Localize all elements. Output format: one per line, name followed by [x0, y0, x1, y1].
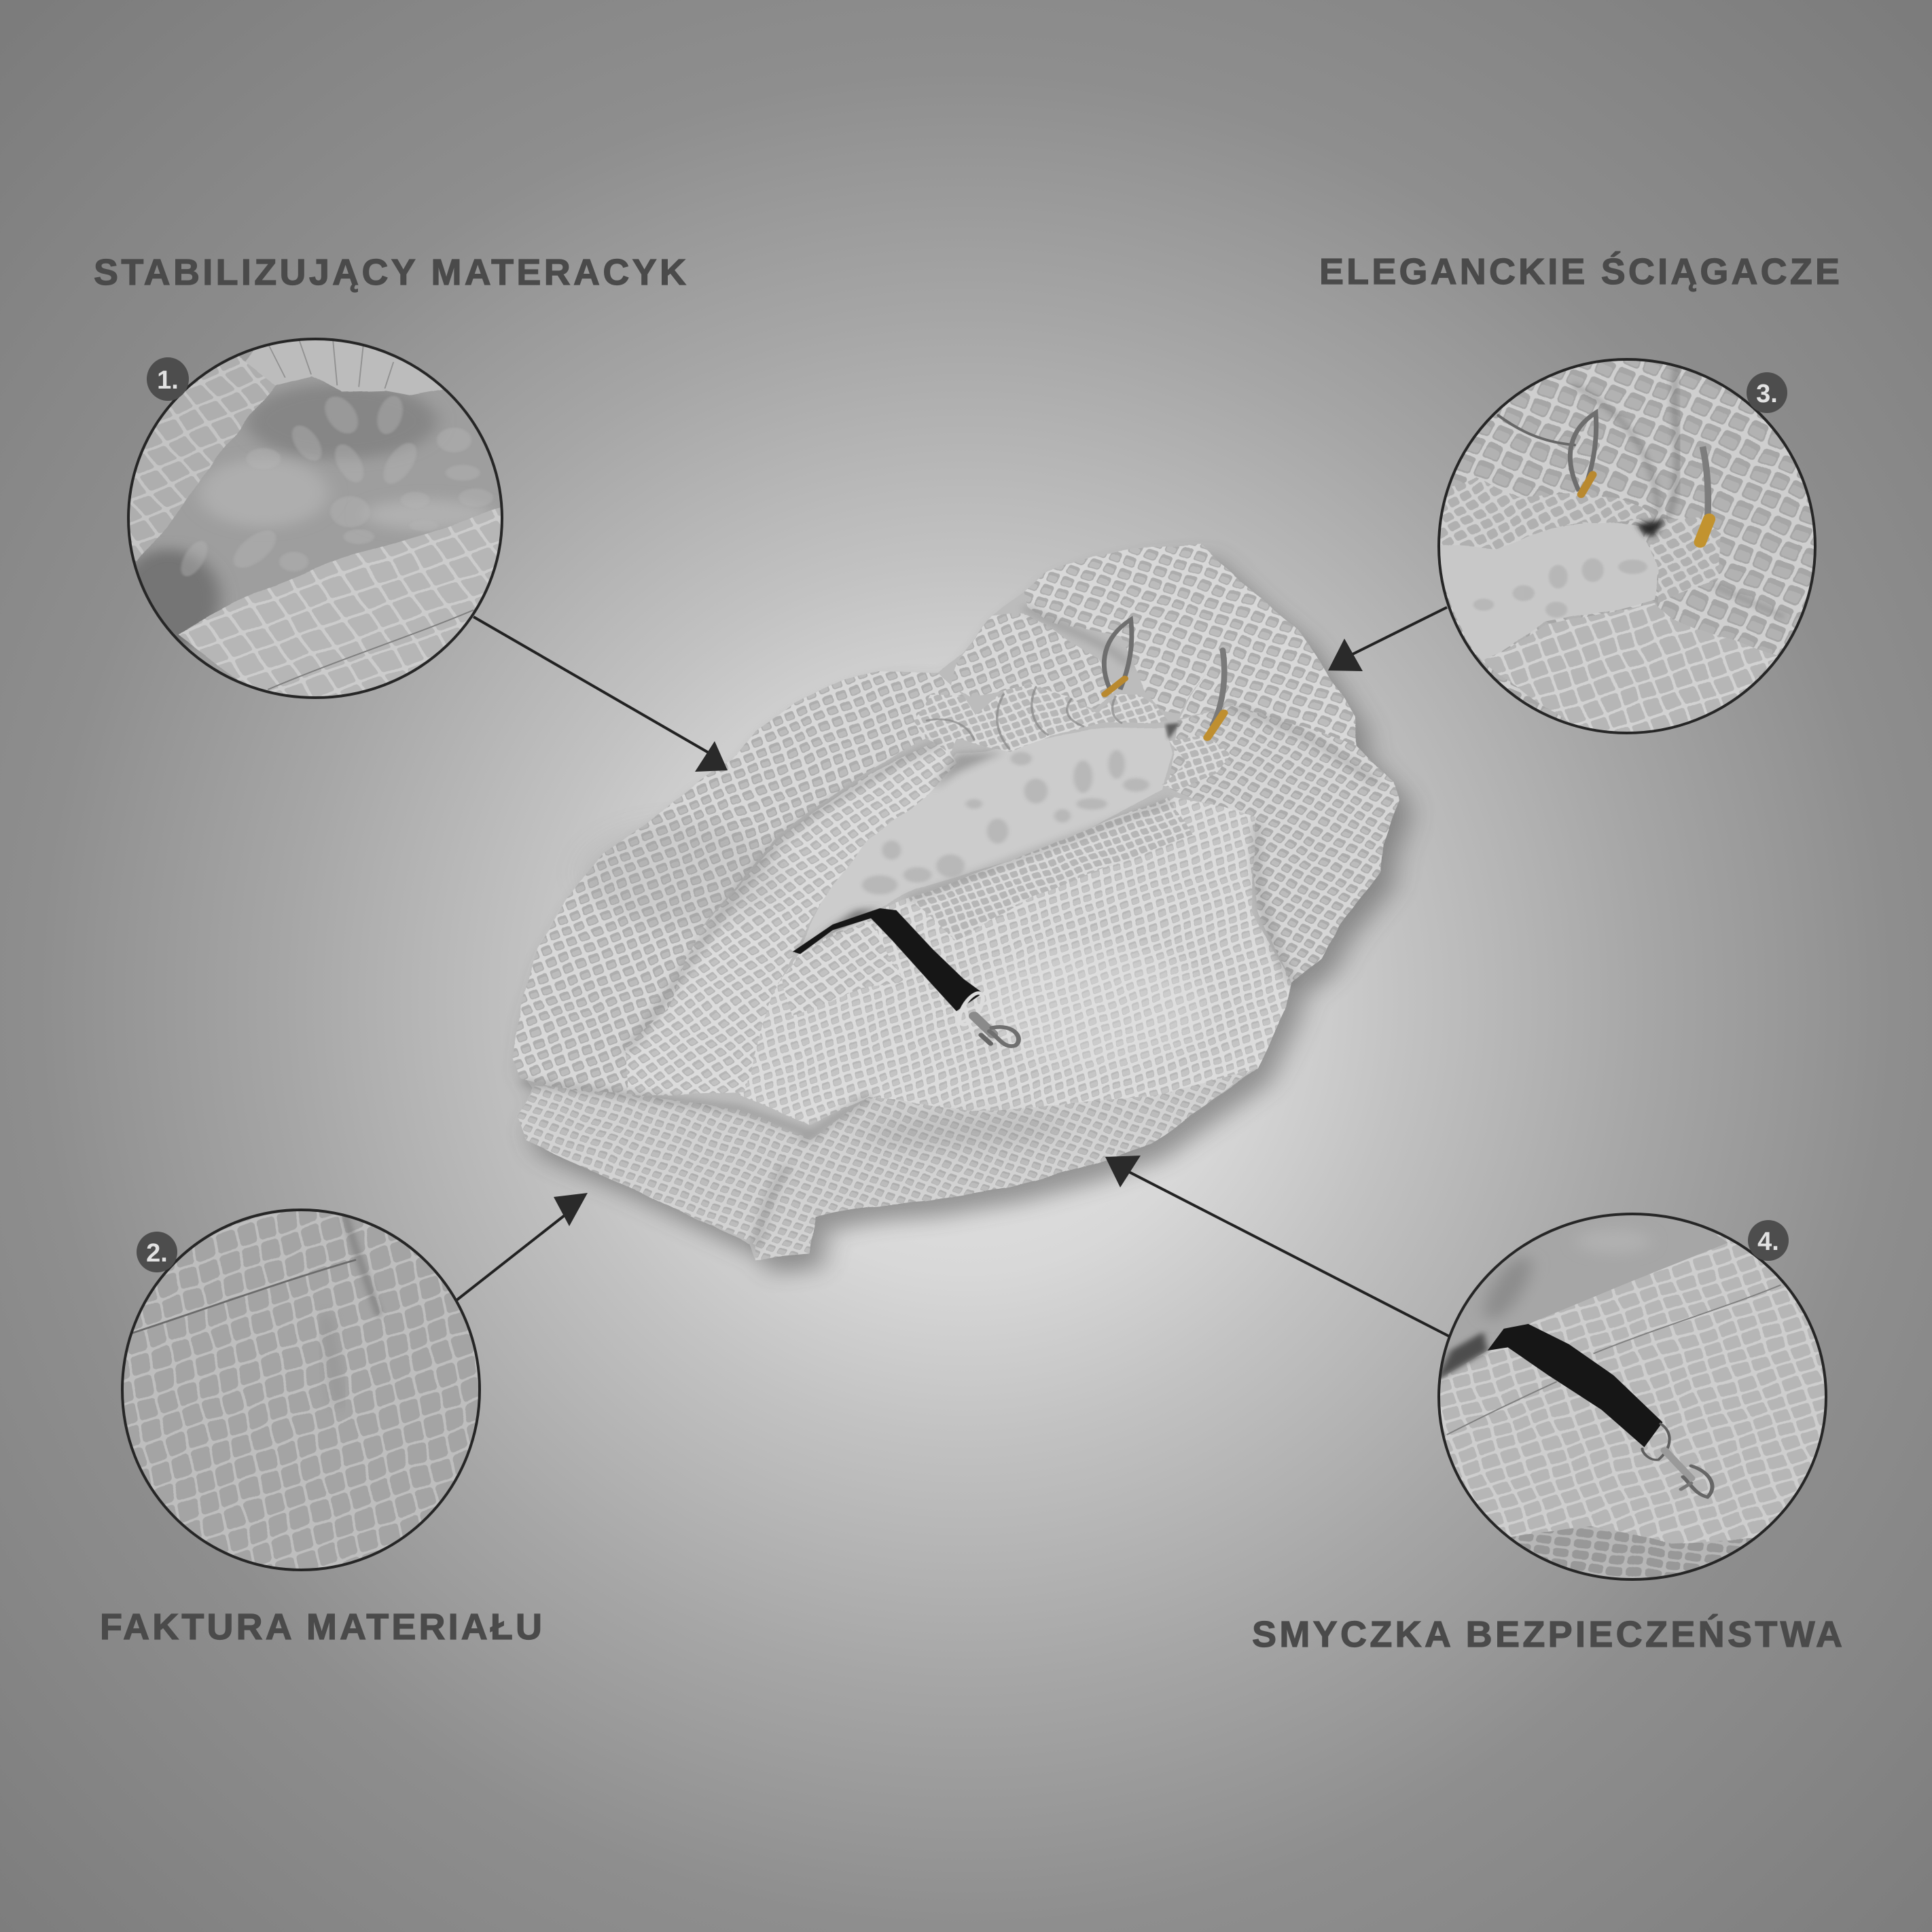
badge 2	[137, 1232, 177, 1272]
safety strap	[793, 908, 983, 1012]
minky mattress	[1433, 521, 1658, 662]
panel: detail circle 1, mattress	[127, 338, 503, 699]
badge 4: 4.	[1757, 1228, 1779, 1256]
upper left lobe	[950, 613, 1115, 709]
minky dots	[800, 723, 1180, 949]
bottom waffle band	[1484, 603, 1778, 738]
elastic loop right	[1702, 446, 1708, 521]
arrow 4: circle 4 to blanket	[1105, 1156, 1449, 1336]
title: eleganckie ściągacze: ELEGANCKIE ŚCIĄGACZE	[1319, 251, 1840, 292]
arrow 3: circle 3 to blanket	[1328, 607, 1447, 671]
seam and fold shading	[131, 1217, 378, 1400]
badge 3: 3.	[1756, 380, 1778, 408]
folded inner flap	[626, 740, 956, 1097]
flap near strap	[783, 918, 904, 1016]
badge 3	[1747, 372, 1787, 413]
minky mattress	[800, 728, 1171, 949]
soft dark and light modelling	[579, 821, 1210, 1151]
arrow 1: circle 1 to blanket	[473, 617, 728, 772]
blanket drop shadow	[526, 558, 1411, 1273]
arrow 2: circle 2 to blanket	[457, 1193, 588, 1300]
circle outline	[128, 339, 502, 698]
metal clasp	[1642, 1424, 1713, 1497]
silhouette base	[514, 544, 1398, 1259]
front large panel	[738, 797, 1292, 1126]
seam lines	[1447, 1285, 1781, 1435]
elastic loop left	[1570, 413, 1596, 493]
top centre lobe	[1024, 544, 1210, 713]
circle outline	[1439, 359, 1815, 733]
left ruffle	[1436, 478, 1655, 549]
top right lobe	[1180, 544, 1357, 745]
product: waffle baby nest blanket	[514, 544, 1411, 1273]
panel: detail circle 2, fabric texture	[121, 1209, 481, 1571]
right rear panel	[1168, 706, 1398, 982]
minky surface	[136, 351, 500, 647]
waffle fabric	[124, 1211, 478, 1569]
fold shading	[526, 609, 1375, 1245]
left hood body	[514, 670, 962, 1094]
badge 2: 2.	[146, 1239, 168, 1268]
gathered waffle backdrop	[1446, 361, 1814, 723]
black strap	[1488, 1324, 1662, 1447]
title: faktura materiału: FAKTURA MATERIAŁU	[100, 1607, 542, 1647]
minky area	[1431, 1207, 1728, 1382]
swivel clasp	[954, 990, 1018, 1046]
badge 1: 1.	[157, 366, 179, 395]
elastic loop with gold toggle right	[1207, 650, 1224, 738]
badge 1	[147, 357, 189, 401]
gold toggle right	[1700, 519, 1709, 542]
title: smyczka bezpieczeństwa: SMYCZKA BEZPIECZEŃSTWA	[1252, 1614, 1842, 1655]
bottom waffle band	[177, 507, 519, 705]
elastic loop with gold toggle left	[1104, 620, 1132, 694]
left waffle strip	[130, 356, 276, 561]
circle outline	[122, 1210, 480, 1570]
gold toggle left	[1581, 475, 1593, 495]
fold accents	[1498, 370, 1782, 616]
panel: detail circle 3, drawstrings	[1429, 349, 1825, 745]
waffle panel	[1418, 1201, 1850, 1600]
circle outline	[1439, 1214, 1826, 1579]
panel: detail circle 4, safety leash	[1418, 1201, 1850, 1600]
ruffle opening left	[915, 685, 1168, 754]
gather lines on the ruffle	[927, 687, 1122, 749]
right side gathers	[1651, 518, 1720, 603]
rear bottom section	[756, 1066, 1257, 1259]
bottom fold	[518, 1085, 812, 1245]
ruffle opening right	[1162, 735, 1230, 789]
title: stabilizujący materacyk: STABILIZUJĄCY MATERACYK	[94, 252, 686, 293]
top ruffled edge	[246, 331, 454, 395]
lower fold band	[1508, 1494, 1833, 1594]
badge 4	[1748, 1220, 1789, 1261]
dark gap	[1636, 519, 1666, 535]
front top band	[909, 797, 1192, 940]
